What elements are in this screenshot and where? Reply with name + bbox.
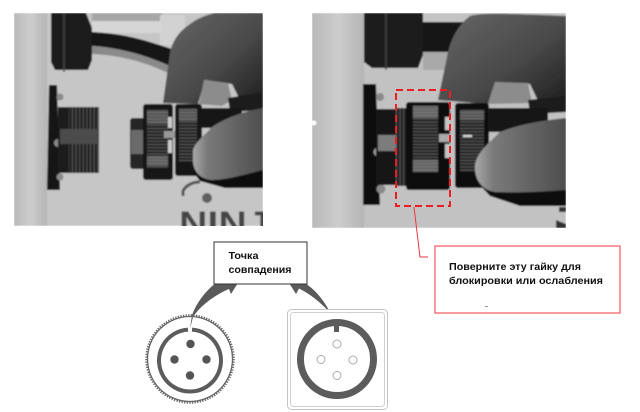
label: match point bbox=[214, 242, 307, 284]
callout: turn the nut: блокировки или ослабления bbox=[449, 275, 603, 287]
photo: connector unplugged: NINJA bbox=[179, 205, 297, 243]
label: match point: совпадения bbox=[228, 264, 292, 276]
diagram: plug face bbox=[146, 316, 234, 402]
arrow: right socket to label bbox=[290, 284, 337, 321]
label: match point: Точка bbox=[228, 250, 259, 262]
lower finger bbox=[475, 118, 566, 192]
upper hand bbox=[438, 14, 566, 108]
black cable bbox=[92, 32, 175, 66]
dashed highlight around nut bbox=[396, 90, 450, 206]
photo: connector unplugged bbox=[14, 13, 263, 226]
lower finger shadow bbox=[482, 187, 566, 207]
photo: connector plugged in with dashed highlight bbox=[312, 13, 566, 228]
lower finger bbox=[193, 108, 263, 180]
diagram: socket face bbox=[288, 310, 388, 410]
callout: turn the nut: Поверните эту гайку для bbox=[449, 261, 581, 273]
callout: turn the nut bbox=[435, 246, 620, 313]
arrow: left connector to label bbox=[190, 284, 237, 329]
upper hand bbox=[163, 13, 263, 108]
leader line to callout bbox=[414, 207, 428, 257]
lower finger shadow bbox=[193, 166, 263, 188]
